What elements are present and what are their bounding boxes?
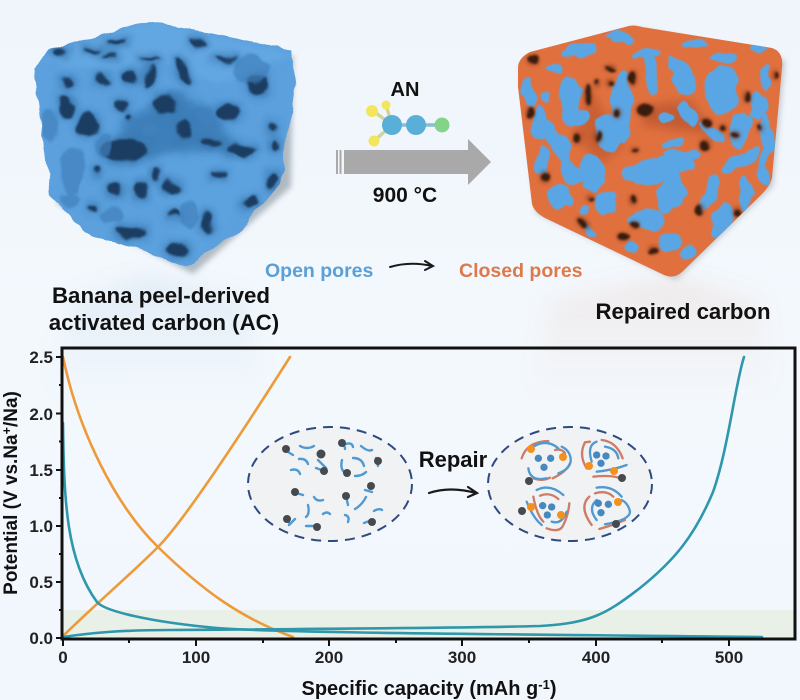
x axis tick labels: 100	[182, 648, 210, 667]
pore cluster: top right	[582, 440, 627, 478]
arrow: process direction	[336, 139, 491, 185]
x axis title: -1	[538, 677, 550, 692]
x axis tick labels: 0	[58, 648, 68, 667]
arrow: repair	[429, 487, 477, 497]
low potential band	[63, 610, 795, 638]
inset: before repair	[248, 427, 412, 541]
y axis tick labels: 0.5	[29, 573, 53, 592]
cube reflection: AC	[50, 275, 265, 395]
x axis tick labels: 500	[715, 648, 743, 667]
y axis tick labels: 0.0	[29, 629, 53, 648]
y axis tick labels	[29, 348, 53, 648]
y axis tick labels: 1.0	[29, 517, 53, 536]
y axis title: Potential (V vs.Na	[1, 434, 22, 595]
chart: potential versus specific capacity	[0, 348, 795, 700]
pore cluster: bottom right	[584, 487, 630, 529]
pore cluster: bottom left	[527, 488, 569, 530]
axis ticks	[56, 357, 729, 646]
y axis title: /Na)	[1, 391, 22, 427]
label: repair: Repair	[419, 447, 488, 472]
label: banana peel-derived activated carbon: Banana peel-derived	[52, 283, 270, 308]
y axis tick labels: 2.5	[29, 348, 53, 367]
y axis title: +	[0, 427, 14, 434]
pore cluster: top left	[522, 441, 571, 480]
x axis title: )	[550, 678, 556, 700]
x axis tick labels: 200	[315, 648, 343, 667]
label: closed pores: Closed pores	[459, 260, 583, 282]
curves	[63, 357, 762, 637]
arrow: open to closed pores	[390, 261, 433, 270]
label: open pores: Open pores	[265, 260, 374, 282]
cube reflection: repaired carbon	[530, 275, 775, 395]
icon: AN molecule	[366, 100, 450, 146]
x axis tick labels: 300	[448, 648, 476, 667]
label: banana peel-derived activated carbon: activated carbon (AC)	[49, 310, 279, 335]
x axis tick labels: 400	[582, 648, 610, 667]
label: temperature: 900 °C	[373, 184, 437, 207]
frame	[62, 348, 795, 639]
orange and blue cube: repaired carbon	[510, 20, 790, 282]
y axis tick labels: 1.5	[29, 461, 53, 480]
x axis title: Specific capacity (mAh g	[302, 678, 538, 700]
x axis tick labels	[58, 648, 743, 667]
label: repaired carbon: Repaired carbon	[595, 299, 771, 324]
y axis tick labels: 2.0	[29, 405, 53, 424]
label: AN: AN	[391, 79, 419, 101]
blue porous cube: activated carbon	[30, 18, 300, 274]
inset: after repair	[488, 427, 652, 541]
